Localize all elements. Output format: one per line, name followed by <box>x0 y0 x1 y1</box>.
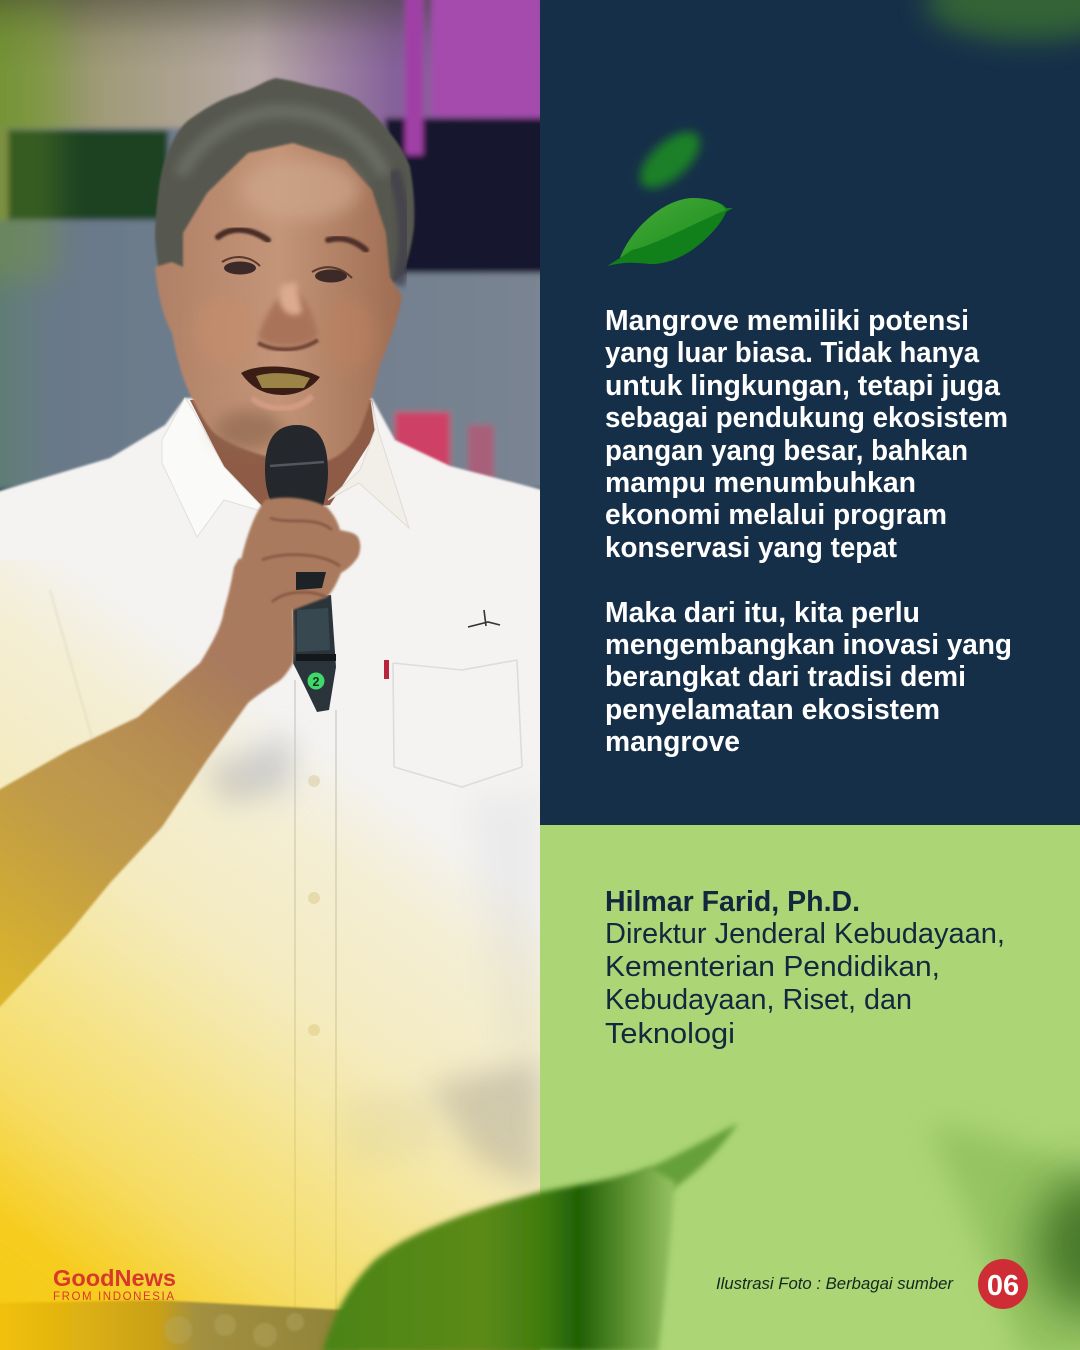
face <box>155 143 402 465</box>
shirt shading <box>205 735 540 1190</box>
panel: green attribution background <box>540 825 1080 1350</box>
microphone status light <box>308 672 324 690</box>
quote paragraph 2 <box>605 597 1012 758</box>
speaker title: Direktur Jenderal Kebudayaan, <box>605 918 1005 950</box>
blurred leaf: bottom right corner <box>930 1125 1080 1350</box>
quote paragraph 2: Maka dari itu, kita perlu <box>605 597 920 629</box>
quote paragraph 1: untuk lingkungan, tetapi juga <box>605 370 1001 402</box>
sleeve edge <box>50 590 92 738</box>
hair <box>155 78 414 296</box>
speaker title: Kementerian Pendidikan, <box>605 951 940 983</box>
speaker title: Teknologi <box>605 1018 735 1050</box>
quote paragraph 1: pangan yang besar, bahkan <box>605 435 968 467</box>
microphone status light: 2 <box>313 675 320 689</box>
quote paragraph 1: ekonomi melalui program <box>605 499 947 531</box>
face shading <box>195 160 374 450</box>
batik pattern <box>164 1313 304 1347</box>
quote paragraph 1: mampu menumbuhkan <box>605 467 916 499</box>
yellow gradient overlay <box>0 560 540 1350</box>
quote text <box>605 305 1012 758</box>
shirt placket and buttons <box>295 680 336 1310</box>
speaker title <box>605 918 1005 1050</box>
blurred leaf: bottom centre foreground <box>322 1123 738 1350</box>
neck <box>190 400 378 512</box>
page number badge: 06 <box>987 1270 1019 1302</box>
logo: GoodNews from Indonesia <box>53 1265 176 1303</box>
icon: green leaf <box>607 198 733 266</box>
green tint top left <box>0 0 60 280</box>
microphone <box>265 425 336 712</box>
photo credit: Ilustrasi Foto : Berbagai sumber <box>716 1274 954 1293</box>
photo background <box>0 0 550 490</box>
photo: speaker holding microphone <box>0 0 550 1350</box>
quote paragraph 1: Mangrove memiliki potensi <box>605 305 969 337</box>
icon: blurred small leaf <box>630 122 710 198</box>
finger creases <box>262 518 340 602</box>
batik cloth at waist <box>0 1300 360 1350</box>
panel: navy quote background <box>540 0 1080 826</box>
speaker title: Kebudayaan, Riset, dan <box>605 984 912 1016</box>
shirt <box>0 398 550 1320</box>
face details <box>218 230 366 408</box>
shirt pocket and tag <box>384 610 522 787</box>
speaker name: Hilmar Farid, Ph.D. <box>605 886 860 918</box>
page number badge <box>978 1259 1028 1309</box>
quote paragraph 1: sebagai pendukung ekosistem <box>605 402 1008 434</box>
quote paragraph 2: mangrove <box>605 726 740 758</box>
quote paragraph 1: konservasi yang tepat <box>605 532 897 564</box>
quote paragraph 2: mengembangkan inovasi yang <box>605 629 1012 661</box>
arm and hand gripping microphone <box>0 498 360 1012</box>
shirt collar <box>162 398 409 537</box>
blurred leaf: top right corner <box>925 0 1080 40</box>
quote paragraph 1 <box>605 305 1008 564</box>
logo: GoodNews from Indonesia: FROM INDONESIA <box>53 1291 174 1303</box>
quote paragraph 1: yang luar biasa. Tidak hanya <box>605 337 980 369</box>
quote paragraph 2: berangkat dari tradisi demi <box>605 661 966 693</box>
logo: GoodNews from Indonesia: GoodNews <box>53 1265 176 1291</box>
speaker attribution <box>605 886 1005 1050</box>
quote paragraph 2: penyelamatan ekosistem <box>605 694 940 726</box>
